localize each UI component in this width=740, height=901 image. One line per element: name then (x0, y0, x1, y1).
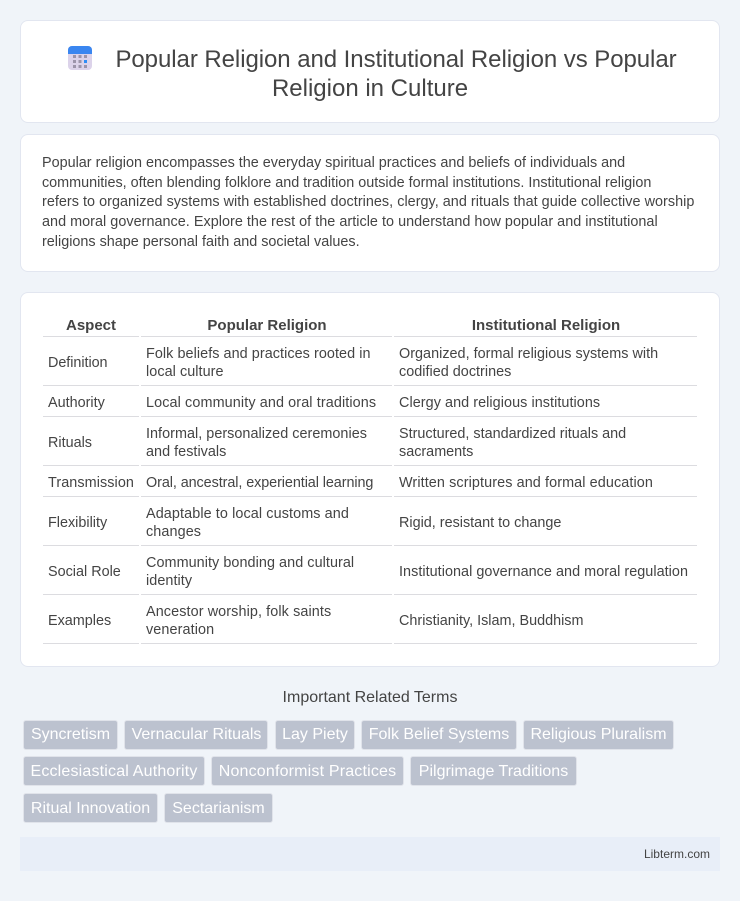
intro text line 4: and moral governance. Explore the rest of the article to understand how popular and institutional (42, 214, 658, 230)
Definition: institutional: Organized, formal religious systems with (399, 346, 658, 362)
Rituals: popular (146, 426, 367, 460)
tag: Nonconformist Practices (219, 763, 396, 780)
Authority: popular: Local community and oral traditions (146, 395, 376, 411)
Definition: popular: Folk beliefs and practices rooted in (146, 346, 371, 362)
intro text line 2: communities, often blending folklore and tradition outside formal institutions. Institutional religion (42, 175, 651, 191)
tag (275, 720, 355, 750)
Examples: institutional: Christianity, Islam, Buddhism (399, 613, 583, 629)
tag: Ecclesiastical Authority (30, 763, 198, 780)
tag: Lay Piety (282, 726, 348, 743)
intro text line 3: refers to organized systems with established doctrines, clergy, and rituals that guide collective worship (42, 194, 694, 210)
tag (124, 720, 268, 750)
table header: Institutional Religion: Institutional Religion (472, 317, 620, 334)
Rituals: institutional: sacraments (399, 444, 473, 460)
Flexibility: popular: changes (146, 524, 201, 540)
tag (23, 756, 205, 786)
footer text: Libterm.com (644, 847, 710, 861)
Examples: popular: veneration (146, 622, 214, 638)
Rituals: institutional (399, 426, 626, 460)
intro text line 5: religions shape personal faith and societal values. (42, 234, 360, 250)
tag: Syncretism (31, 726, 110, 743)
Examples: popular: Ancestor worship, folk saints (146, 604, 331, 620)
tag (361, 720, 517, 750)
Transmission: popular: Oral, ancestral, experiential learning (146, 475, 373, 491)
tag (410, 756, 577, 786)
tag: Sectarianism (172, 800, 265, 817)
row: Authority: Authority (48, 395, 105, 411)
tag: Ritual Innovation (31, 800, 150, 817)
Flexibility: institutional: Rigid, resistant to change (399, 515, 561, 531)
row: Social Role: Social Role (48, 564, 121, 580)
heading: related terms: Important Related Terms (283, 689, 457, 706)
panel: comparison table (20, 292, 720, 667)
tag: Vernacular Rituals (132, 726, 261, 743)
tag: Religious Pluralism (530, 726, 667, 743)
title: Popular Religion and Institutional Religion vs Popular (115, 46, 677, 73)
Social Role: popular: Community bonding and cultural (146, 555, 354, 571)
Flexibility: popular (146, 506, 349, 540)
tag (211, 756, 404, 786)
tag (523, 720, 674, 750)
Definition: popular (146, 346, 371, 380)
panel: introduction (20, 134, 720, 272)
tag: Folk Belief Systems (369, 726, 509, 743)
table header: Aspect: Aspect (66, 317, 116, 334)
tag (23, 720, 118, 750)
Examples: popular (146, 604, 331, 638)
footer bar (20, 837, 720, 871)
Definition: institutional (399, 346, 658, 380)
row: Definition: Definition (48, 355, 108, 371)
row: Flexibility: Flexibility (48, 515, 107, 531)
Definition: institutional: codified doctrines (399, 364, 511, 380)
Flexibility: popular: Adaptable to local customs and (146, 506, 349, 522)
Definition: popular: local culture (146, 364, 224, 380)
tag (164, 793, 273, 823)
tag: Pilgrimage Traditions (419, 763, 568, 780)
table header: Popular Religion: Popular Religion (207, 317, 327, 334)
row: Transmission: Transmission (48, 475, 134, 491)
intro text line 1: Popular religion encompasses the everyday spiritual practices and beliefs of individuals and (42, 155, 625, 171)
Rituals: institutional: Structured, standardized rituals and (399, 426, 626, 442)
Rituals: popular: Informal, personalized ceremonies (146, 426, 367, 442)
Authority: institutional: Clergy and religious institutions (399, 395, 600, 411)
Transmission: institutional: Written scriptures and formal education (399, 475, 653, 491)
Rituals: popular: and festivals (146, 444, 226, 460)
title line 2: Religion in Culture (272, 75, 468, 102)
tag (23, 793, 158, 823)
row: Examples: Examples (48, 613, 111, 629)
Social Role: institutional: Institutional governance and moral regulation (399, 564, 688, 580)
Social Role: popular: identity (146, 573, 192, 589)
row: Rituals: Rituals (48, 435, 92, 451)
panel: header (20, 20, 720, 123)
icon: calendar (68, 46, 92, 70)
Social Role: popular (146, 555, 354, 589)
